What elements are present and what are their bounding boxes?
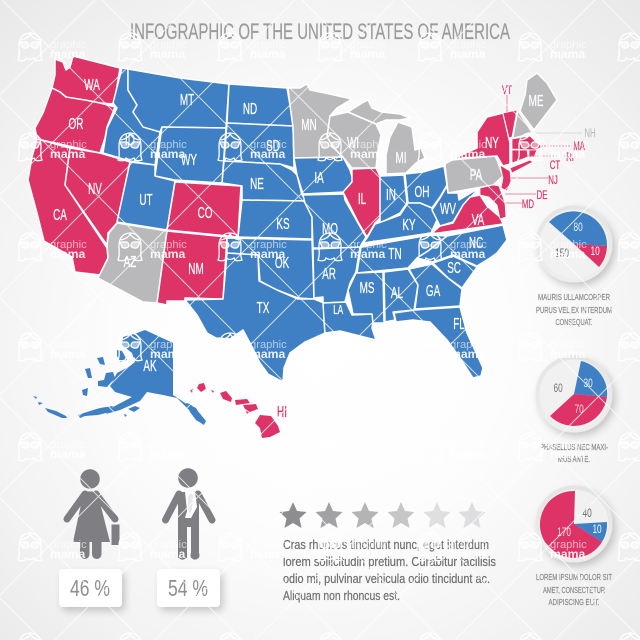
callout: MA: MA bbox=[573, 141, 585, 154]
state: Pennsylvania: PA bbox=[470, 166, 482, 184]
state: Arizona: AZ bbox=[124, 253, 136, 271]
state: Tennessee: TN bbox=[388, 245, 402, 263]
state: Nevada bbox=[65, 148, 130, 245]
state: Kentucky: KY bbox=[402, 216, 416, 234]
state: Oklahoma bbox=[227, 238, 314, 299]
callout: NJ: NJ bbox=[548, 175, 558, 188]
state: Long Island bbox=[510, 160, 533, 173]
pie chart 1: 10 bbox=[590, 246, 600, 258]
sector: 70 bbox=[550, 394, 607, 426]
callout: CT: CT bbox=[550, 160, 560, 173]
state: Utah bbox=[117, 162, 175, 230]
state: Washington: WA bbox=[84, 76, 100, 94]
state: Michigan: MI bbox=[395, 149, 407, 167]
map of the United States bbox=[28, 56, 557, 438]
star rating bbox=[280, 502, 486, 528]
callouts for small northeastern states bbox=[502, 85, 596, 212]
callout: VT: VT bbox=[502, 85, 512, 98]
paragraph: odio mi, pulvinar vehicula odio tincidunt ac. bbox=[283, 572, 490, 586]
state: Tennessee bbox=[357, 235, 447, 273]
state: Alabama bbox=[384, 269, 418, 322]
state: Virginia: VA bbox=[472, 211, 484, 229]
state: Wisconsin bbox=[327, 112, 381, 168]
state: Louisiana: LA bbox=[333, 303, 344, 318]
pie chart 3 caption: AMET, CONSECTETUR bbox=[543, 585, 605, 595]
pie chart 3: 40 bbox=[582, 508, 592, 520]
state: New York: NY bbox=[485, 134, 499, 152]
pie chart 3 caption: ADIPISCING ELIT. bbox=[548, 597, 600, 607]
state: Oklahoma: OK bbox=[275, 254, 289, 272]
state: Georgia bbox=[409, 264, 462, 309]
state: Montana: MT bbox=[180, 91, 194, 109]
state: Missouri bbox=[303, 194, 366, 248]
state: Arkansas bbox=[313, 247, 360, 303]
pie chart 1 bbox=[536, 206, 612, 282]
callout line: NJ bbox=[511, 177, 548, 179]
state: Wisconsin: WI bbox=[347, 134, 359, 152]
callout: DE: DE bbox=[537, 190, 548, 203]
state: New Mexico: NM bbox=[188, 260, 204, 278]
state: West Virginia bbox=[432, 186, 479, 226]
state: New Jersey bbox=[500, 165, 511, 191]
paragraph: Cras rhoncus tincidunt nunc, eget interdum bbox=[283, 538, 489, 552]
callout: MD: MD bbox=[522, 199, 534, 212]
state: Louisiana bbox=[323, 302, 376, 340]
pie chart 2 caption: PHASELLUS NEC MAXI- bbox=[540, 442, 608, 452]
state: Maine: ME bbox=[529, 92, 544, 110]
state: Montana bbox=[128, 69, 229, 132]
state: Alaska: AK bbox=[143, 357, 157, 375]
sector: 30 bbox=[574, 361, 607, 397]
state: Kentucky bbox=[363, 203, 437, 243]
state: Nebraska bbox=[222, 161, 307, 201]
pie chart 1 caption bbox=[536, 292, 612, 327]
state: Wyoming bbox=[155, 127, 226, 183]
pie chart 1: 150 bbox=[555, 248, 569, 260]
pie chart 2 bbox=[536, 356, 612, 432]
state: Maryland and Delaware bbox=[480, 185, 506, 219]
state: Ohio bbox=[405, 166, 447, 208]
callout line: VT bbox=[506, 95, 508, 112]
state: Alabama: AL bbox=[391, 284, 403, 302]
pie chart 2: 30 bbox=[583, 378, 593, 390]
stat box: 54 %: 54 % bbox=[168, 575, 208, 601]
dial disc bbox=[536, 356, 612, 432]
state: Mississippi bbox=[348, 272, 384, 323]
pie chart 2 caption: MUS ANTE. bbox=[558, 454, 590, 464]
state: Hawaii: HI bbox=[277, 403, 287, 421]
state: Vermont bbox=[503, 110, 517, 138]
pie chart 3 caption bbox=[536, 572, 613, 607]
state: Maine bbox=[520, 73, 557, 130]
state: Kansas: KS bbox=[276, 215, 290, 233]
state: Oregon: OR bbox=[69, 115, 83, 133]
sector: 80 bbox=[549, 211, 607, 246]
callout line: DE bbox=[505, 193, 536, 195]
state: Indiana bbox=[380, 175, 407, 223]
sector: 10 bbox=[574, 244, 607, 267]
state: Michigan upper peninsula bbox=[348, 100, 410, 124]
state: Florida bbox=[394, 307, 483, 378]
state: South Dakota bbox=[224, 123, 294, 168]
state: Nevada: NV bbox=[88, 180, 102, 198]
state: Alaska bbox=[33, 330, 206, 425]
state: Florida: FL bbox=[453, 315, 465, 333]
state: North Dakota: ND bbox=[243, 100, 257, 118]
pie chart 2: 70 bbox=[574, 404, 584, 416]
state: Nebraska: NE bbox=[250, 175, 264, 193]
callout line: MA bbox=[541, 145, 572, 147]
pie chart 2: 60 bbox=[553, 383, 563, 395]
pie chart 3: 10 bbox=[592, 524, 602, 536]
paragraph: lorem sollicitudin pretium. Curabitur facilisis bbox=[283, 555, 496, 569]
pie chart 1 caption: MAURIS ULLAMCORPER bbox=[538, 292, 610, 302]
state: Iowa: IA bbox=[314, 169, 324, 187]
state: New Hampshire bbox=[513, 111, 532, 138]
state: Utah: UT bbox=[139, 191, 153, 209]
state: Indiana: IN bbox=[386, 186, 396, 204]
state: Massachusetts bbox=[512, 136, 543, 150]
callout: RI: RI bbox=[566, 152, 574, 165]
icon: man with tie bbox=[166, 468, 212, 560]
state: Illinois: IL bbox=[358, 190, 366, 208]
state: Idaho bbox=[103, 68, 160, 165]
state: Minnesota bbox=[288, 84, 352, 158]
pie chart 1: 80 bbox=[573, 222, 583, 234]
state: Rhode Island bbox=[529, 150, 537, 157]
sector: 170 bbox=[540, 491, 602, 558]
state: Idaho: ID bbox=[125, 131, 135, 149]
state: Mississippi: MS bbox=[360, 279, 375, 297]
state: Wyoming: WY bbox=[181, 151, 197, 169]
state: Ohio: OH bbox=[415, 183, 429, 201]
state: Arkansas: AR bbox=[322, 265, 336, 283]
state: California: CA bbox=[53, 206, 67, 224]
state: Minnesota: MN bbox=[301, 116, 317, 134]
state: Oregon bbox=[35, 88, 115, 153]
paragraph: Aliquam non rhoncus est. bbox=[283, 589, 400, 603]
state: Washington bbox=[52, 56, 120, 104]
pie chart 1 caption: CONSEQUAT. bbox=[556, 317, 592, 327]
pie chart 3: 170 bbox=[557, 527, 571, 539]
state: South Dakota: SD bbox=[266, 137, 280, 155]
state: Missouri: MO bbox=[322, 220, 338, 238]
state: Georgia: GA bbox=[426, 282, 440, 300]
state: North Dakota bbox=[227, 84, 293, 126]
state: South Carolina bbox=[433, 256, 477, 288]
state: Virginia bbox=[431, 195, 503, 234]
state: New York bbox=[452, 113, 510, 166]
state: Iowa bbox=[294, 157, 353, 194]
callout line: CT bbox=[528, 155, 566, 157]
state: Texas bbox=[185, 253, 325, 382]
callout line: NH bbox=[535, 132, 582, 134]
callout line: MD bbox=[505, 202, 522, 204]
dial disc bbox=[536, 486, 612, 562]
state: Kansas bbox=[238, 200, 312, 239]
state: Michigan bbox=[386, 122, 425, 174]
dial disc bbox=[536, 206, 612, 282]
state: Pennsylvania bbox=[445, 156, 503, 193]
state: West Virginia: WV bbox=[440, 200, 456, 218]
state: Connecticut bbox=[512, 150, 528, 163]
callout: NH: NH bbox=[584, 128, 596, 141]
state: New Mexico bbox=[157, 231, 227, 305]
stat box: 54 % bbox=[157, 569, 220, 607]
icon: woman with briefcase bbox=[67, 469, 120, 559]
stat box: 46 % bbox=[59, 569, 122, 607]
stat box: 46 %: 46 % bbox=[70, 575, 110, 601]
sector: 10 bbox=[574, 522, 607, 542]
state: South Carolina: SC bbox=[447, 259, 461, 277]
state: California bbox=[28, 139, 108, 275]
state: Illinois bbox=[343, 168, 381, 237]
pie chart 3 bbox=[536, 486, 612, 562]
state: Colorado: CO bbox=[198, 204, 212, 222]
state: North Carolina: NC bbox=[469, 234, 484, 252]
state: Colorado bbox=[167, 182, 241, 237]
pie chart 2 caption bbox=[540, 442, 608, 464]
state: Arizona bbox=[98, 223, 167, 303]
state: North Carolina bbox=[417, 225, 507, 266]
state: Hawaii bbox=[190, 383, 287, 438]
paragraph bbox=[283, 538, 496, 603]
state: Texas: TX bbox=[257, 299, 269, 317]
